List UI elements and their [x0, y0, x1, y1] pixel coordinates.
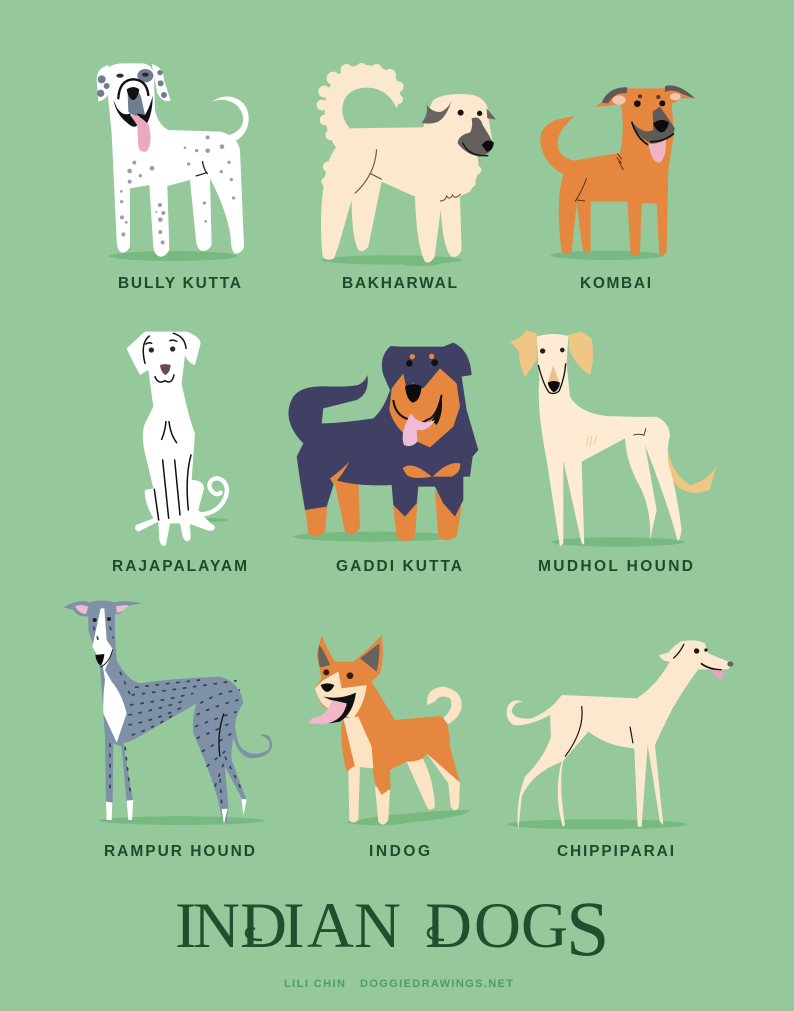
label: Rajapalayam: RAJAPALAYAM: [112, 558, 247, 575]
legs: [348, 753, 460, 825]
body: [321, 94, 493, 263]
face: [389, 368, 460, 447]
label: Indog: INDOG: [369, 843, 430, 860]
label: Mudhol Hound: MUDHOL HOUND: [538, 558, 693, 575]
dog: Gaddi Kutta: [289, 343, 478, 542]
face: [694, 648, 699, 654]
tail: [427, 687, 462, 724]
fluffy tail: [325, 65, 400, 148]
leg lines: [565, 706, 633, 757]
legs: [305, 477, 462, 541]
title flourishes: [246, 928, 444, 940]
body: [88, 600, 247, 823]
tail: [197, 478, 227, 514]
chest patch: [403, 463, 460, 478]
body: [537, 334, 682, 547]
face: [548, 365, 559, 383]
tongue: [130, 115, 151, 152]
dog: Bully Kutta: [97, 63, 249, 261]
ear: [659, 641, 686, 662]
label: Bully Kutta: BULLY KUTTA: [118, 275, 241, 292]
dog: Mudhol Hound: [510, 330, 717, 547]
dog: Rampur Hound: [63, 600, 272, 825]
label: Chippiparai: CHIPPIPARAI: [557, 843, 674, 860]
label: Bakharwal: BAKHARWAL: [342, 275, 457, 292]
body: [106, 63, 244, 257]
dog: Bakharwal: [317, 63, 496, 266]
white chest: [92, 608, 127, 743]
mouth: [323, 693, 356, 723]
label: Rampur Hound: RAMPUR HOUND: [104, 843, 255, 860]
tongue: [403, 413, 435, 446]
dog: Indog: [309, 635, 470, 825]
ears: [97, 64, 171, 102]
tongue: [309, 700, 347, 724]
eyes: [634, 100, 641, 107]
title: S: [566, 885, 609, 972]
muzzle: [458, 117, 493, 157]
dog: Chippiparai: [507, 640, 733, 830]
ears: [422, 101, 452, 124]
tongue: [710, 669, 723, 679]
title: INDIANDOG: [175, 890, 568, 962]
label: Gaddi Kutta: GADDI KUTTA: [336, 558, 462, 575]
body: [507, 640, 733, 830]
nose and mouth: [95, 654, 104, 665]
label: Kombai: KOMBAI: [580, 275, 651, 292]
face markings: [137, 69, 153, 82]
tail: [212, 96, 249, 143]
nose and eyes: [321, 683, 334, 692]
labels: [104, 275, 693, 860]
ears: [510, 330, 593, 377]
spots: [120, 135, 235, 244]
white cheek and chest: [343, 717, 373, 768]
tail: [665, 452, 717, 493]
dog: Rajapalayam: [127, 332, 228, 546]
body: [289, 343, 478, 517]
credit: LILI CHIN: [284, 978, 345, 990]
credit: [284, 978, 513, 990]
dog: Kombai: [540, 85, 695, 260]
eyes: [458, 110, 464, 116]
brindle stripes: [93, 627, 243, 803]
tongue: [648, 139, 666, 163]
face: [149, 347, 154, 353]
body: [540, 87, 695, 256]
head: [315, 635, 383, 718]
credit: DOGGIEDRAWINGS.NET: [360, 978, 513, 990]
body: [127, 332, 215, 546]
ears: [63, 601, 142, 617]
ears: [602, 85, 695, 103]
muzzle: [632, 107, 675, 144]
leg lines: [154, 422, 191, 520]
body: [341, 673, 460, 795]
tail: [233, 705, 272, 758]
